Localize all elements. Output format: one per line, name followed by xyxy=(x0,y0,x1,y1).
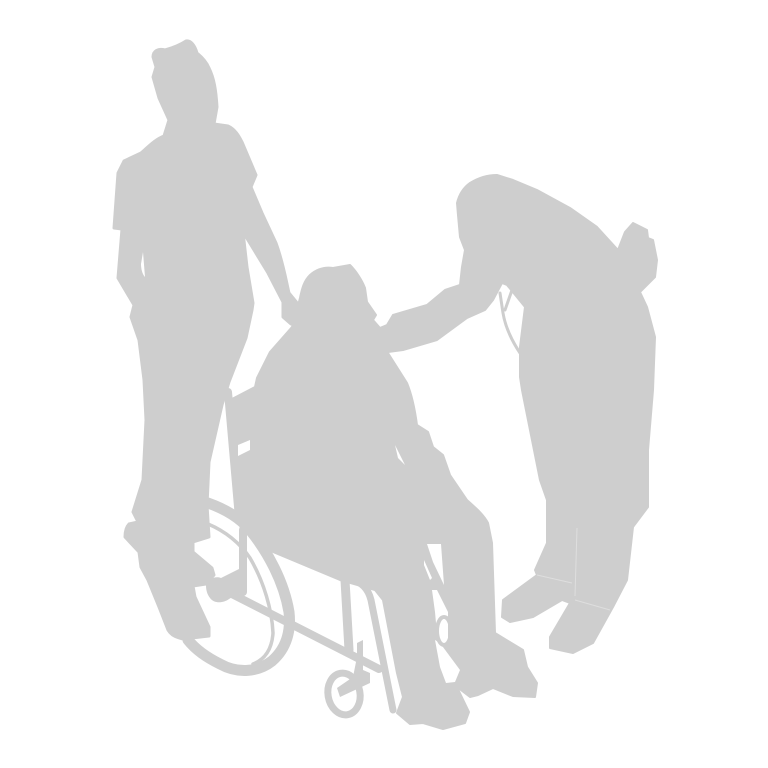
seat back frame xyxy=(228,392,239,518)
stethoscope tube xyxy=(500,290,520,353)
nurse body xyxy=(380,175,657,653)
front caster wheel xyxy=(325,640,370,717)
seated patient xyxy=(232,265,537,729)
axle hub xyxy=(206,568,245,602)
hip gap xyxy=(141,252,145,277)
small front wheel xyxy=(437,617,451,645)
rear wheel xyxy=(188,503,289,670)
leaning nurse xyxy=(380,175,657,653)
standing nurse xyxy=(114,41,298,639)
frame rails xyxy=(230,528,393,710)
gaps in patient figure xyxy=(238,440,460,683)
wheelchair xyxy=(188,392,393,717)
